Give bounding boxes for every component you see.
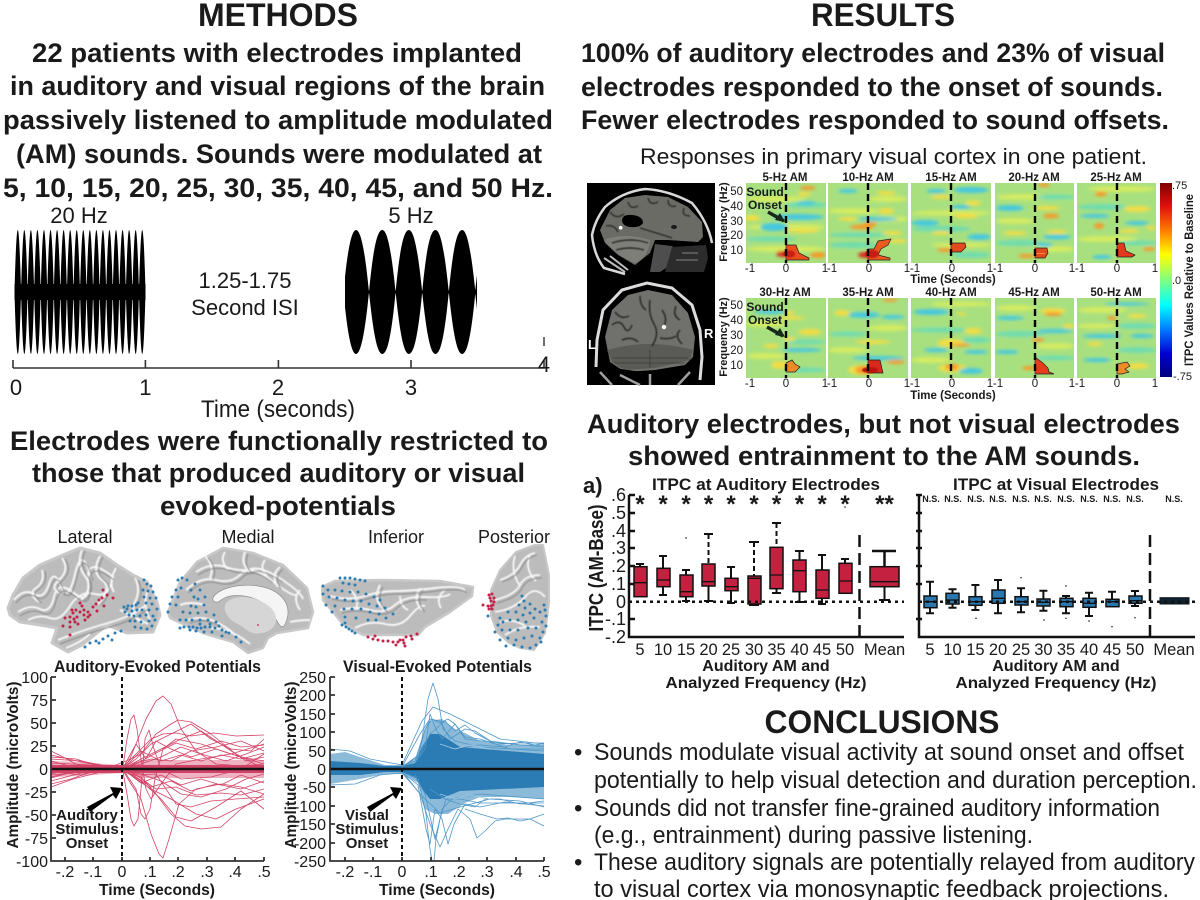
x tick labels: -.2: [336, 864, 354, 881]
N.S. labels: N.S.: [1012, 494, 1030, 504]
text block: conclusions list: •: [574, 849, 582, 876]
row 1 time ticks: -1: [745, 263, 755, 275]
box plot: ITPC at auditory electrodes: [586, 475, 905, 692]
row 1 titles: 25-Hz AM: [1090, 172, 1142, 184]
callout: visual stimulus onset: Visual: [345, 807, 389, 824]
sound onset callout row 1: Onset: [748, 198, 782, 212]
time axis: [10, 337, 550, 423]
y axis: [629, 495, 904, 637]
significance stars: *: [840, 491, 850, 518]
row 1 titles: 15-Hz AM: [925, 172, 977, 184]
frequency axis titles: [718, 182, 730, 377]
row 2 time ticks: -1: [993, 378, 1003, 390]
heatmap 25 Hz: [1077, 183, 1156, 263]
time axis titles: Time (Seconds): [910, 390, 996, 402]
x axis title: Time (Seconds): [99, 882, 215, 899]
brain: inferior view: [322, 527, 473, 646]
callout: visual stimulus onset: Onset: [346, 835, 388, 852]
significance stars: *: [772, 491, 782, 518]
x axis title: Auditory AM and: [992, 658, 1120, 675]
row 2 time ticks: 0: [1032, 378, 1038, 390]
traces: [330, 683, 544, 861]
x axis title: Analyzed Frequency (Hz): [666, 675, 866, 692]
y tick labels: 250: [299, 670, 326, 687]
x tick labels: 15: [966, 641, 985, 659]
subheading: responses: Responses in primary visual cortex in one patient.: [640, 144, 1147, 169]
row 2 titles: 45-Hz AM: [1008, 287, 1060, 299]
axes: [330, 677, 544, 861]
text block: conclusions list: •: [574, 795, 582, 822]
x tick labels: 35: [767, 641, 786, 659]
heading: electrode restriction: evoked-potentials: [160, 491, 396, 521]
y axis title: Amplitude (microVolts): [5, 682, 22, 848]
y tick labels: [16, 670, 48, 871]
heatmap 50 Hz: [1077, 298, 1156, 378]
significance stars: *: [749, 491, 759, 518]
row 2 titles: 40-Hz AM: [925, 287, 977, 299]
brain: posterior view: [478, 527, 550, 650]
significance stars: *: [681, 491, 691, 518]
heading: conclusions: CONCLUSIONS: [764, 704, 1000, 740]
whiskers: [926, 580, 1139, 616]
heatmap 15 Hz: [911, 183, 991, 263]
MRI orientation labels: R: [704, 326, 714, 341]
time axis: 2: [272, 375, 284, 400]
x tick labels: .4: [509, 864, 523, 881]
y tick labels: [294, 670, 326, 871]
callout: auditory stimulus onset: Onset: [66, 835, 108, 852]
x tick labels: 5: [635, 641, 645, 659]
y tick labels: .1: [611, 574, 626, 594]
x tick labels: 40: [1080, 641, 1098, 659]
5 Hz waveform: [345, 203, 477, 354]
frequency axis titles: Frequency (Hz): [718, 297, 730, 377]
x tick labels: -.1: [84, 864, 102, 881]
row 2 frequency ticks: 40: [730, 315, 743, 327]
text block: methods description: in auditory and visual regions of the brain: [10, 71, 545, 101]
ISI label: Second ISI: [191, 295, 299, 320]
heatmap 30 Hz: [746, 298, 826, 378]
x axis title: Analyzed Frequency (Hz): [956, 675, 1156, 692]
title: ITPC at Visual Electrodes: [953, 475, 1159, 494]
x tick labels: -.2: [56, 864, 74, 881]
heatmap 35 Hz: [828, 298, 908, 378]
row 1 time ticks: 0: [783, 263, 789, 275]
y tick labels: -100: [16, 854, 48, 871]
text block: results summary: 100% of auditory electrodes and 23% of visual: [581, 38, 1165, 68]
N.S. labels: [922, 494, 1183, 504]
N.S. labels: N.S.: [1034, 494, 1052, 504]
text block: results summary: electrodes responded to the onset of sounds.: [581, 72, 1163, 102]
x tick labels: 0: [398, 864, 407, 881]
row 1 time ticks: 0: [949, 263, 955, 275]
sound onset callout row 2: Onset: [748, 313, 782, 327]
x tick labels: [635, 641, 905, 659]
brain: medial view: Medial: [221, 527, 275, 547]
significance stars: *: [795, 491, 805, 518]
significance stars: *: [704, 491, 714, 518]
y axis title: Amplitude (microVolts): [283, 682, 300, 848]
text block: methods description: (AM) sounds. Sounds were modulated at: [16, 139, 542, 169]
N.S. labels: N.S.: [967, 494, 985, 504]
heading: electrode restriction: Electrodes were functionally restricted to: [10, 426, 548, 456]
x tick labels: 50: [1126, 641, 1144, 659]
row 1 time ticks: 1: [822, 263, 828, 275]
heatmap 40 Hz: [911, 298, 991, 378]
y tick labels: -250: [294, 854, 326, 871]
heatmap 20 Hz: [995, 183, 1074, 263]
row 1 titles: 20-Hz AM: [1008, 172, 1060, 184]
zero line: [919, 600, 1195, 603]
chart title: Auditory-Evoked Potentials: [54, 657, 261, 676]
medians: [634, 571, 899, 592]
row 1 time ticks: -1: [910, 263, 920, 275]
x tick labels: 10: [943, 641, 962, 659]
y tick labels: .2: [611, 556, 626, 576]
title: ITPC at Auditory Electrodes: [652, 475, 880, 494]
sound onset callout row 2: Sound: [746, 300, 784, 314]
outliers: [975, 578, 1136, 627]
y tick labels: -50: [303, 780, 326, 797]
text block: methods description: 22 patients with electrodes implanted: [32, 38, 522, 68]
text block: conclusions list: Sounds did not transfer fine-grained auditory information: [594, 795, 1160, 822]
y tick labels: -100: [294, 799, 326, 816]
brain: medial view: [168, 527, 313, 653]
significance stars: *: [658, 491, 668, 518]
axes: [51, 677, 264, 861]
row 2 time ticks: -1: [1075, 378, 1085, 390]
y tick labels: 100: [299, 725, 326, 742]
row 1 time ticks: 1: [1069, 263, 1075, 275]
x tick labels: 25: [1012, 641, 1030, 659]
time axis: 0: [10, 375, 22, 400]
x tick labels: 15: [677, 641, 695, 659]
row 2 frequency ticks: 30: [730, 330, 743, 342]
y tick labels: 50: [308, 744, 326, 761]
callout: visual stimulus onset: Stimulus: [335, 821, 399, 838]
y tick labels: 25: [30, 739, 48, 756]
y tick labels: .4: [611, 521, 626, 541]
y tick labels: -200: [294, 836, 326, 853]
chart: ITPC heatmap grid: [718, 172, 1196, 402]
text block: methods description: [3, 38, 553, 203]
x tick labels: 30: [1034, 641, 1053, 659]
significance stars: *: [635, 491, 645, 518]
row 2 time ticks: -1: [910, 378, 920, 390]
row 2 frequency ticks: 10: [730, 360, 743, 372]
separator: [1149, 535, 1151, 637]
heading: electrode restriction: [10, 426, 548, 521]
row 1 frequency ticks: 40: [730, 201, 743, 213]
heatmap 10 Hz: [828, 183, 908, 263]
row 2 titles: 50-Hz AM: [1090, 287, 1142, 299]
N.S. labels: N.S.: [1057, 494, 1075, 504]
red boxes: [634, 547, 899, 604]
row 1 time ticks: 0: [1114, 263, 1120, 275]
y tick labels: 0: [39, 762, 48, 779]
x tick labels: .1: [424, 864, 438, 881]
x tick labels: .3: [480, 864, 494, 881]
time axis: Time (seconds): [201, 396, 355, 423]
y tick labels: -75: [25, 831, 48, 848]
x tick labels: 35: [1057, 641, 1075, 659]
significance stars: [635, 491, 894, 518]
row 2 frequency ticks: 20: [730, 345, 743, 357]
color bar: -.75: [1173, 371, 1192, 383]
y tick labels: .6: [611, 485, 626, 505]
row 2 time ticks: 0: [783, 378, 789, 390]
x axis title: [666, 658, 866, 692]
zero line: [629, 600, 904, 603]
callout: auditory stimulus onset: [55, 807, 119, 852]
row 2 time ticks: 0: [949, 378, 955, 390]
text block: conclusions list: [574, 739, 1197, 900]
row 2 titles: 30-Hz AM: [759, 287, 811, 299]
y tick labels: -.1: [605, 609, 626, 629]
heading: entrainment finding: showed entrainment to the AM sounds.: [628, 441, 1140, 471]
x tick labels: .4: [228, 864, 242, 881]
MRI orientation labels: [588, 326, 714, 352]
heading: electrode restriction: those that produced auditory or visual: [32, 458, 525, 488]
x axis title: [956, 658, 1156, 692]
x tick labels: .1: [143, 864, 157, 881]
callout: auditory stimulus onset: Auditory: [56, 807, 118, 824]
brain: inferior view: Inferior: [368, 527, 424, 547]
row 2 frequency ticks: 50: [730, 300, 743, 312]
heatmap 5 Hz: [746, 183, 826, 263]
x tick labels: 45: [813, 641, 831, 659]
y tick labels: -25: [25, 785, 48, 802]
row 2 time ticks: 1: [822, 378, 828, 390]
x tick labels: 45: [1103, 641, 1121, 659]
ISI label: 1.25-1.75: [199, 268, 291, 293]
5 Hz waveform: 5 Hz: [388, 203, 434, 228]
x tick labels: 20: [699, 641, 718, 659]
color bar: .75: [1172, 180, 1187, 192]
chart title: Visual-Evoked Potentials: [343, 657, 532, 676]
N.S. labels: N.S.: [1126, 494, 1144, 504]
x tick labels: .3: [200, 864, 214, 881]
row 2 titles: [759, 287, 1142, 299]
heatmap 45 Hz: [995, 298, 1074, 378]
heading: entrainment finding: Auditory electrodes, but not visual electrodes: [587, 409, 1180, 439]
color bar: .0: [1172, 275, 1181, 287]
frequency axis titles: Frequency (Hz): [718, 182, 730, 262]
text block: conclusions list: potentially to help visual detection and duration perception.: [594, 767, 1197, 794]
row 2 time ticks: 1: [904, 378, 910, 390]
x tick labels: 25: [722, 641, 740, 659]
row 1 frequency ticks: 10: [730, 245, 743, 257]
row 1 frequency ticks: 50: [730, 186, 743, 198]
callout: visual stimulus onset: [335, 807, 399, 852]
y tick labels: [605, 485, 626, 647]
whiskers: [636, 523, 896, 605]
zero line and onset marker: [51, 768, 264, 770]
heading: entrainment finding: [587, 409, 1180, 471]
20 Hz waveform: 20 Hz: [50, 203, 108, 228]
row 2 time ticks: 0: [1114, 378, 1120, 390]
x tick labels: [56, 864, 271, 881]
y tick labels: .5: [611, 503, 626, 523]
x tick labels: 40: [790, 641, 809, 659]
row 2 time ticks: -1: [827, 378, 837, 390]
chart: visual-evoked potentials: [283, 657, 551, 899]
x tick labels: .5: [257, 864, 271, 881]
brain: lateral view: [8, 527, 160, 652]
medians: [924, 598, 1142, 603]
N.S. labels: N.S.: [944, 494, 962, 504]
y tick labels: -.2: [605, 627, 626, 647]
row 1 frequency ticks: 20: [730, 230, 743, 242]
blue boxes: [924, 590, 1142, 608]
x tick labels: Mean: [1153, 641, 1195, 659]
mean box: [1160, 598, 1189, 604]
row 1 time ticks: 0: [866, 263, 872, 275]
brain: lateral view: Lateral: [57, 527, 113, 547]
20 Hz waveform: [14, 203, 146, 354]
sound onset callout row 1: [746, 185, 785, 222]
row 1 frequency ticks: [730, 186, 743, 257]
row 1 time ticks: -1: [1075, 263, 1085, 275]
x tick labels: 5: [925, 641, 935, 659]
y tick labels: 75: [30, 693, 48, 710]
significance stars: **: [875, 491, 894, 518]
traces: [51, 696, 264, 858]
outliers: [685, 507, 846, 538]
text block: conclusions list: •: [574, 739, 582, 766]
x tick labels: -.1: [364, 864, 382, 881]
callout: auditory stimulus onset: Stimulus: [55, 821, 119, 838]
MRI coronal: [596, 283, 702, 385]
row 2 time ticks: 0: [866, 378, 872, 390]
chart: auditory-evoked potentials: [5, 657, 271, 899]
x axis title: Time (Seconds): [379, 882, 495, 899]
y tick labels: 0: [317, 762, 326, 779]
row 1 frequency ticks: 30: [730, 216, 743, 228]
row 1 time ticks: -1: [993, 263, 1003, 275]
y axis title: ITPC (AM-Base): [586, 504, 608, 632]
y tick labels: 100: [21, 670, 48, 687]
x tick labels: 20: [989, 641, 1007, 659]
x tick labels: [336, 864, 551, 881]
ISI label: [191, 268, 299, 320]
x tick labels: 50: [836, 641, 854, 659]
brain: posterior view: Posterior: [478, 527, 550, 547]
text block: methods description: passively listened to amplitude modulated: [3, 105, 553, 135]
N.S. labels: N.S.: [1103, 494, 1121, 504]
y tick labels: 200: [299, 688, 326, 705]
x tick labels: 10: [654, 641, 672, 659]
x tick labels: 30: [745, 641, 763, 659]
row 2 time ticks: 1: [1069, 378, 1075, 390]
time axis: 4: [538, 352, 550, 377]
N.S. labels: N.S.: [1080, 494, 1098, 504]
y tick labels: -50: [25, 808, 48, 825]
row 2 frequency ticks: [730, 300, 743, 372]
arrow: auditory stimulus onset: [87, 787, 122, 812]
box plot: ITPC at visual electrodes: [916, 475, 1195, 692]
time axis: 3: [405, 375, 417, 400]
text block: conclusions list: (e.g., entrainment) during passive listening.: [594, 822, 1033, 849]
panel label: a): [583, 473, 603, 498]
x tick labels: [925, 641, 1195, 659]
x tick labels: .2: [171, 864, 185, 881]
row 1 titles: [763, 172, 1142, 184]
row 2 time ticks: -1: [745, 378, 755, 390]
MRI images: [587, 183, 715, 385]
color bar: [1160, 180, 1196, 383]
x tick labels: .5: [537, 864, 551, 881]
y tick labels: .3: [611, 538, 626, 558]
y axis: [916, 495, 1195, 637]
MRI sagittal: [592, 189, 712, 274]
time axis titles: Time (Seconds): [910, 274, 996, 286]
text block: methods description: 5, 10, 15, 20, 25, 30, 35, 40, 45, and 50 Hz.: [3, 173, 553, 203]
row 1 time ticks: 1: [1152, 263, 1158, 275]
N.S. labels: N.S.: [922, 494, 940, 504]
y tick labels: -150: [294, 817, 326, 834]
text block: results summary: Fewer electrodes responded to sound offsets.: [581, 105, 1169, 135]
N.S. labels: N.S.: [989, 494, 1007, 504]
significance stars: *: [726, 491, 736, 518]
row 2 time ticks: [745, 378, 1158, 390]
row 1 time ticks: 0: [1032, 263, 1038, 275]
x tick labels: 0: [118, 864, 127, 881]
row 1 time ticks: -1: [827, 263, 837, 275]
row 1 time ticks: 1: [904, 263, 910, 275]
N.S. labels: N.S.: [1165, 494, 1183, 504]
arrow: visual stimulus onset: [367, 787, 402, 812]
row 2 titles: 35-Hz AM: [842, 287, 894, 299]
text block: results summary: [581, 38, 1169, 135]
time axis titles: [910, 274, 996, 402]
sound onset callout row 2: [746, 300, 785, 337]
row 2 time ticks: 1: [1152, 378, 1158, 390]
row 2 time ticks: 1: [987, 378, 993, 390]
MRI orientation labels: L: [588, 337, 596, 352]
x tick labels: .2: [452, 864, 466, 881]
time axis: 1: [139, 375, 152, 400]
separator: [858, 535, 861, 637]
x axis title: Auditory AM and: [702, 658, 830, 675]
text block: conclusions list: Sounds modulate visual activity at sound onset and offset: [594, 739, 1184, 766]
chart: stimulus waveform timeline: [10, 203, 550, 423]
y tick labels: 0: [616, 592, 626, 612]
row 1 titles: 10-Hz AM: [842, 172, 894, 184]
zero line and onset marker: [330, 768, 544, 770]
row 1 time ticks: [745, 263, 1158, 275]
y tick labels: 150: [299, 707, 326, 724]
sound onset callout row 1: Sound: [746, 185, 784, 199]
y tick labels: 50: [30, 716, 48, 733]
row 1 titles: 5-Hz AM: [763, 172, 807, 184]
significance stars: *: [817, 491, 827, 518]
color bar: ITPC Values Relative to Baseline: [1182, 194, 1196, 366]
row 1 time ticks: 1: [987, 263, 993, 275]
x tick labels: Mean: [864, 641, 905, 659]
